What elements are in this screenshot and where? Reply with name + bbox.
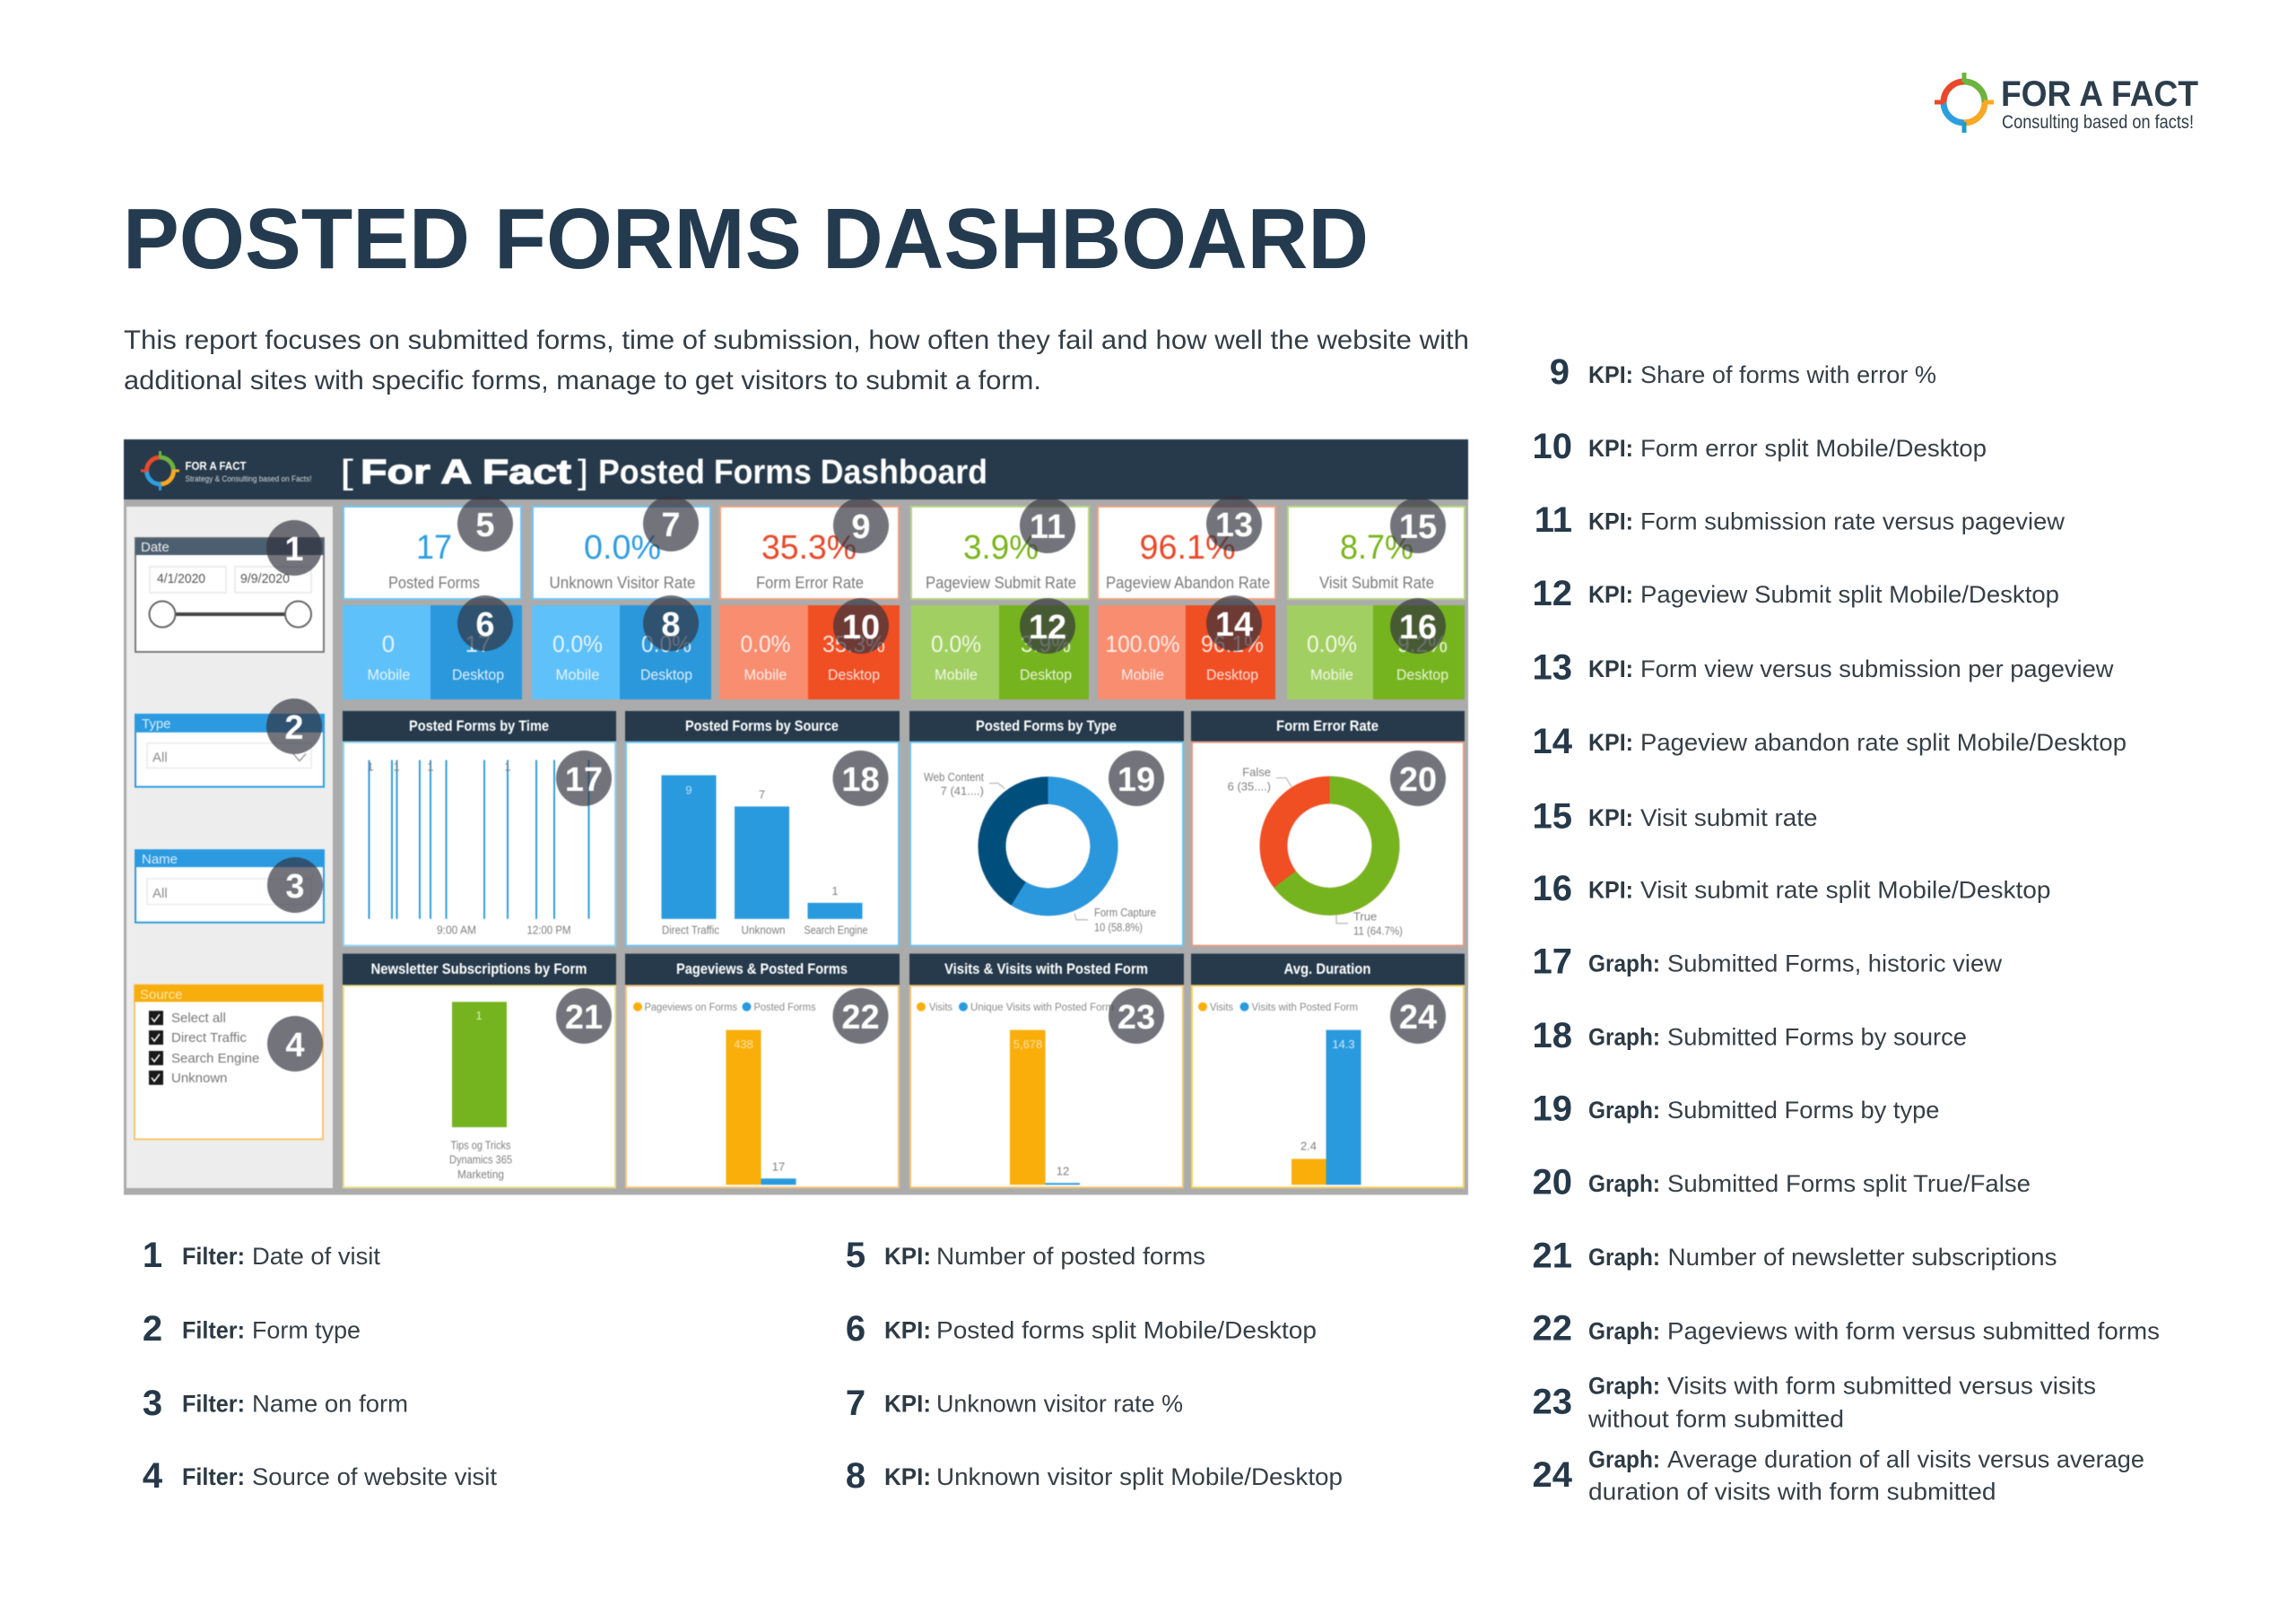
legend item 12: KPI:: [1588, 581, 1633, 608]
dashboard header: FOR A FACT: [185, 459, 247, 473]
legend item 3: [143, 1384, 408, 1423]
KPI card: unknown visitor rate: Desktop: [640, 666, 692, 683]
chart: form error rate: 11 (64.7%): [1353, 924, 1403, 938]
intro text: [124, 325, 1469, 395]
numbered badges overlay: 8: [661, 606, 681, 644]
legend item 8: KPI:: [884, 1463, 931, 1490]
numbered badges overlay: 6: [475, 606, 495, 644]
chart: average duration: 2.4: [1300, 1140, 1317, 1152]
numbered badges overlay: 10: [842, 609, 880, 647]
legend item 22: 22: [1532, 1309, 1572, 1349]
chart: posted forms by type: [909, 711, 1184, 946]
legend item 1: 1: [143, 1236, 162, 1275]
chart: newsletter subscriptions by form: [343, 954, 616, 1187]
chart: posted forms by type: Posted Forms by Type: [976, 717, 1117, 734]
legend item 14: [1532, 722, 2126, 761]
legend item 6: 6: [846, 1309, 865, 1349]
legend item 3: 3: [143, 1384, 162, 1423]
numbered badges overlay: 17: [565, 761, 603, 799]
numbered badges overlay: 7: [661, 507, 681, 544]
legend item 1: Filter:: [182, 1243, 245, 1270]
chart: posted forms by time: 1: [367, 760, 374, 774]
numbered badges overlay: 15: [1399, 508, 1437, 546]
KPI card: pageview submit rate: [911, 507, 1089, 699]
legend item 24: Graph:: [1588, 1445, 1660, 1472]
KPI card: form error rate: 35.3%: [822, 630, 885, 657]
legend item 9: 9: [1550, 352, 1570, 392]
KPI card: pageview submit rate: Desktop: [1020, 666, 1072, 683]
chart: posted forms by source: 9: [685, 784, 692, 796]
filter: date: 9/9/2020: [240, 571, 290, 586]
legend item 15: Visit submit rate: [1640, 804, 1817, 831]
legend item 23: [1532, 1372, 2096, 1433]
KPI card: pageview abandon rate: Pageview Abandon Rate: [1106, 574, 1270, 592]
chart: newsletter subscriptions by form: Tips og Tricks: [450, 1139, 511, 1151]
chart: visits and visits with posted form: [909, 954, 1184, 1187]
legend item 22: Pageviews with form versus submitted forms: [1667, 1318, 2160, 1345]
legend item 23: without form submitted: [1587, 1406, 1844, 1433]
chart: pageviews and posted forms: 17: [772, 1159, 785, 1173]
legend item 11: [1535, 500, 2065, 540]
logo: For A Fact: [1935, 73, 2198, 133]
KPI card: visit submit rate: [1287, 507, 1465, 699]
legend item 13: 13: [1532, 647, 1572, 687]
legend item 16: Visit submit rate split Mobile/Desktop: [1640, 877, 2050, 904]
numbered badges overlay: 13: [1215, 507, 1253, 544]
legend item 8: 8: [846, 1456, 865, 1496]
legend item 4: 4: [143, 1456, 163, 1496]
legend item 21: 21: [1532, 1236, 1572, 1275]
numbered badges overlay: 3: [285, 868, 305, 906]
legend item 23: 23: [1532, 1383, 1572, 1422]
chart: posted forms by time: 12:00 PM: [526, 924, 570, 937]
legend item 20: Submitted Forms split True/False: [1667, 1170, 2031, 1197]
legend item 13: [1532, 647, 2114, 687]
chart: posted forms by type: Web Content: [924, 770, 984, 784]
filter sidebar: [126, 507, 333, 1188]
legend item 1: [143, 1236, 380, 1275]
chart: posted forms by source: Direct Traffic: [662, 924, 719, 937]
chart: visits and visits with posted form: Visits: [929, 1001, 952, 1013]
legend item 11: 11: [1535, 500, 1572, 540]
legend item 9: [1550, 352, 1936, 392]
dashboard header: For A Fact: [361, 454, 571, 491]
legend: filters column: [143, 1236, 497, 1496]
legend item 24: duration of visits with form submitted: [1588, 1478, 1996, 1505]
numbered badges overlay: 22: [841, 999, 880, 1037]
chart: posted forms by time: 1: [393, 760, 400, 774]
legend item 10: [1532, 427, 1987, 466]
legend item 14: KPI:: [1588, 729, 1633, 756]
legend item 20: Graph:: [1588, 1170, 1660, 1197]
filter: source: [135, 985, 323, 1140]
KPI card: form error rate: Desktop: [828, 666, 880, 683]
legend item 11: Form submission rate versus pageview: [1640, 508, 2065, 534]
chart: visits and visits with posted form: Visits & Visits with Posted Form: [944, 960, 1148, 977]
legend item 2: [143, 1309, 361, 1349]
KPI card: posted forms: [343, 507, 522, 699]
filter: date: 4/1/2020: [157, 571, 205, 586]
KPI card: pageview submit rate: 3.9%: [963, 529, 1039, 567]
numbered badges overlay: 24: [1399, 999, 1437, 1037]
chart: posted forms by time: 1: [427, 760, 434, 774]
legend item 8: [846, 1456, 1343, 1496]
legend item 6: Posted forms split Mobile/Desktop: [936, 1316, 1317, 1343]
KPI card: posted forms: Desktop: [452, 666, 504, 683]
chart: average duration: 14.3: [1332, 1037, 1355, 1051]
chart: posted forms by type: 7 (41....): [941, 784, 984, 797]
chart: newsletter subscriptions by form: 1: [475, 1009, 483, 1022]
panel: dashboard screenshot: [124, 439, 1468, 1194]
chart: posted forms by source: 7: [759, 787, 765, 801]
KPI card: pageview abandon rate: Desktop: [1206, 666, 1258, 683]
chart: posted forms by source: 1: [831, 884, 839, 898]
legend item 23: Graph:: [1588, 1372, 1660, 1399]
legend item 2: Form type: [252, 1316, 361, 1343]
chart: posted forms by source: Posted Forms by Source: [685, 717, 839, 734]
legend item 7: 7: [846, 1384, 865, 1423]
numbered badges overlay: 23: [1118, 999, 1155, 1037]
legend item 18: [1532, 1016, 1967, 1055]
legend item 2: Filter:: [182, 1316, 245, 1343]
legend item 5: 5: [846, 1236, 865, 1275]
legend item 8: Unknown visitor split Mobile/Desktop: [936, 1463, 1343, 1490]
filter: name: Name: [142, 852, 178, 867]
dashboard header: Posted Forms Dashboard: [598, 454, 987, 491]
logo: For A Fact: Consulting based on facts!: [2002, 112, 2194, 133]
filter: name: All: [152, 886, 168, 901]
legend item 19: Submitted Forms by type: [1667, 1097, 1939, 1124]
filter: name: [135, 850, 324, 923]
KPI card: posted forms: 17: [416, 529, 452, 567]
filter: type: All: [152, 751, 168, 766]
numbered badges overlay: 5: [475, 507, 495, 544]
KPI card: form error rate: Mobile: [744, 666, 787, 683]
numbered badges overlay: 9: [851, 508, 871, 546]
legend item 12: 12: [1532, 574, 1572, 613]
legend item 15: 15: [1532, 796, 1572, 836]
legend item 15: [1532, 796, 1817, 836]
chart: newsletter subscriptions by form: Marketing: [457, 1167, 504, 1181]
legend item 7: [846, 1384, 1183, 1423]
KPI card: posted forms: Posted Forms: [388, 574, 480, 592]
KPI card: pageview abandon rate: [1098, 507, 1275, 699]
filter: source: Unknown: [171, 1071, 227, 1086]
legend item 7: Unknown visitor rate %: [936, 1390, 1183, 1417]
chart: average duration: Avg. Duration: [1283, 960, 1370, 977]
legend item 17: 17: [1532, 942, 1572, 981]
legend item 14: 14: [1532, 722, 1573, 761]
legend item 20: 20: [1532, 1162, 1572, 1202]
chart: visits and visits with posted form: Unique Visits with Posted Form: [970, 1001, 1114, 1013]
KPI card: visit submit rate: 0.0%: [1307, 630, 1357, 657]
intro text: additional sites with specific forms, manage to get visitors to submit a form.: [124, 366, 1041, 395]
KPI card: posted forms: Mobile: [368, 666, 411, 683]
KPI card: form error rate: [719, 507, 900, 699]
KPI card: unknown visitor rate: 0.0%: [584, 529, 661, 567]
chart: form error rate: True: [1353, 910, 1377, 924]
legend item 19: 19: [1532, 1089, 1572, 1128]
title: POSTED: [123, 191, 470, 287]
chart: average duration: Visits with Posted Form: [1251, 1001, 1358, 1013]
filter: type: [135, 715, 324, 787]
KPI card: form error rate: 0.0%: [741, 630, 791, 657]
dashboard header: Strategy & Consulting based on Facts!: [185, 474, 312, 483]
chart: form error rate: 6 (35....): [1228, 780, 1271, 793]
chart: posted forms by time: 9:00 AM: [437, 924, 476, 937]
KPI card: visit submit rate: 8.7%: [1340, 529, 1413, 567]
filter: date: Date: [141, 540, 170, 555]
numbered badges overlay: 4: [285, 1027, 305, 1064]
chart: average duration: [1191, 954, 1465, 1187]
legend item 11: KPI:: [1588, 508, 1633, 534]
legend item 2: 2: [143, 1309, 162, 1349]
chart: pageviews and posted forms: Posted Forms: [753, 1001, 816, 1013]
chart: posted forms by time: 1: [504, 760, 511, 774]
legend item 10: Form error split Mobile/Desktop: [1640, 435, 1987, 462]
chart: newsletter subscriptions by form: Dynamics 365: [449, 1152, 512, 1166]
filter: date: [135, 538, 324, 652]
legend item 5: Number of posted forms: [936, 1243, 1205, 1270]
KPI card: posted forms: 17: [465, 630, 491, 657]
numbered badges overlay: 1: [284, 531, 304, 568]
legend item 13: KPI:: [1588, 655, 1633, 682]
legend item 24: [1532, 1445, 2144, 1505]
legend item 9: Share of forms with error %: [1640, 361, 1936, 388]
legend item 10: 10: [1532, 427, 1572, 466]
numbered badges overlay: 21: [565, 999, 603, 1037]
filter: source: Direct Traffic: [171, 1030, 247, 1046]
dashboard header: [: [340, 454, 354, 491]
legend item 18: Graph:: [1588, 1024, 1660, 1051]
chart: visits and visits with posted form: 5,678: [1013, 1037, 1042, 1051]
legend item 18: Submitted Forms by source: [1667, 1024, 1967, 1051]
legend item 9: KPI:: [1588, 361, 1633, 388]
dashboard header: [124, 439, 1468, 499]
legend item 10: KPI:: [1588, 435, 1633, 462]
legend item 6: [846, 1309, 1317, 1349]
numbered badges overlay: 20: [1399, 761, 1437, 799]
chart: pageviews and posted forms: [625, 954, 900, 1187]
KPI card: visit submit rate: Visit Submit Rate: [1319, 574, 1434, 592]
chart: average duration: Visits: [1210, 1001, 1233, 1013]
filter: source: Source: [140, 987, 183, 1002]
KPI card: posted forms: 0: [382, 630, 395, 657]
KPI card: unknown visitor rate: 0.0%: [641, 630, 691, 657]
intro text: This report focuses on submitted forms, time of submission, how often they fail and how well the website with: [124, 325, 1469, 355]
chart: pageviews and posted forms: Pageviews & Posted Forms: [676, 960, 848, 977]
KPI card: visit submit rate: 9.2%: [1397, 630, 1448, 657]
legend: right column: [1532, 352, 2160, 1505]
KPI card: pageview abandon rate: 100.0%: [1105, 630, 1180, 657]
legend item 3: Name on form: [252, 1390, 408, 1417]
chart: form error rate: Form Error Rate: [1276, 717, 1378, 734]
legend item 15: KPI:: [1588, 804, 1633, 831]
chart: pageviews and posted forms: Pageviews on Forms: [644, 1001, 737, 1013]
legend item 22: [1532, 1309, 2160, 1349]
chart: posted forms by type: 10 (58.8%): [1094, 921, 1143, 934]
legend item 21: [1532, 1236, 2057, 1275]
KPI card: form error rate: Form Error Rate: [756, 574, 864, 592]
legend item 17: [1532, 942, 2002, 981]
chart: form error rate: [1191, 711, 1465, 946]
filter: source: Select all: [171, 1011, 226, 1026]
legend item 1: Date of visit: [252, 1243, 380, 1270]
legend item 22: Graph:: [1588, 1318, 1660, 1345]
legend item 17: Submitted Forms, historic view: [1667, 950, 2002, 977]
legend item 13: Form view versus submission per pageview: [1640, 655, 2114, 682]
dashboard header: ]: [578, 454, 588, 491]
KPI card: unknown visitor rate: [532, 507, 711, 699]
legend item 4: Filter:: [182, 1463, 245, 1490]
legend item 7: KPI:: [884, 1390, 931, 1417]
filter: source: Search Engine: [171, 1051, 259, 1066]
KPI card: unknown visitor rate: 0.0%: [552, 630, 603, 657]
KPI card: visit submit rate: Mobile: [1310, 666, 1353, 683]
numbered badges overlay: 14: [1215, 606, 1253, 644]
legend item 6: KPI:: [884, 1316, 931, 1343]
numbered badges overlay: 18: [841, 761, 880, 799]
KPI card: pageview abandon rate: 96.1%: [1201, 630, 1264, 657]
legend item 14: Pageview abandon rate split Mobile/Desktop: [1640, 729, 2126, 756]
legend item 19: [1532, 1089, 1939, 1128]
legend item 17: Graph:: [1588, 950, 1660, 977]
KPI card: form error rate: 35.3%: [761, 529, 857, 567]
chart: visits and visits with posted form: 12: [1057, 1164, 1069, 1177]
numbered badges overlay: 16: [1399, 609, 1437, 647]
title: FORMS: [494, 191, 802, 287]
numbered badges overlay: 11: [1030, 508, 1065, 546]
KPI card: pageview abandon rate: 96.1%: [1139, 529, 1236, 567]
legend item 20: [1532, 1162, 2031, 1202]
numbered badges overlay: [266, 496, 1446, 1072]
legend: KPI middle column: [846, 1236, 1343, 1496]
legend item 21: Graph:: [1588, 1244, 1660, 1271]
KPI card: unknown visitor rate: Mobile: [556, 666, 599, 683]
legend item 23: Visits with form submitted versus visits: [1667, 1372, 2096, 1399]
chart: posted forms by time: Posted Forms by Time: [409, 717, 549, 734]
logo: For A Fact: FOR A FACT: [2001, 74, 2198, 114]
legend item 12: Pageview Submit split Mobile/Desktop: [1640, 581, 2059, 608]
KPI card: visit submit rate: Desktop: [1396, 666, 1448, 683]
legend item 16: KPI:: [1588, 877, 1633, 904]
legend item 19: Graph:: [1588, 1097, 1660, 1124]
chart: form error rate: False: [1242, 766, 1271, 779]
KPI card: pageview submit rate: Mobile: [935, 666, 978, 683]
legend item 18: 18: [1532, 1016, 1572, 1055]
legend item 16: [1532, 869, 2050, 908]
legend item 24: 24: [1532, 1455, 1573, 1495]
filter: type: Type: [142, 716, 171, 732]
chart: pageviews and posted forms: 438: [734, 1037, 753, 1051]
KPI card: unknown visitor rate: Unknown Visitor Rate: [549, 574, 696, 592]
numbered badges overlay: 2: [284, 709, 304, 747]
title: DASHBOARD: [822, 191, 1369, 287]
chart: posted forms by type: Form Capture: [1094, 906, 1156, 919]
legend item 4: Source of website visit: [252, 1463, 497, 1490]
legend item 3: Filter:: [182, 1390, 245, 1417]
title: [123, 191, 1369, 287]
legend item 21: Number of newsletter subscriptions: [1668, 1244, 2057, 1271]
legend item 5: [846, 1236, 1205, 1275]
legend item 12: [1532, 574, 2059, 613]
chart: posted forms by source: Search Engine: [804, 924, 867, 937]
numbered badges overlay: 19: [1118, 761, 1155, 799]
chart: posted forms by time: [343, 711, 616, 946]
KPI card: pageview abandon rate: Mobile: [1121, 666, 1164, 683]
chart: posted forms by source: Unknown: [741, 924, 786, 937]
legend item 16: 16: [1532, 869, 1572, 908]
KPI card: pageview submit rate: 3.9%: [1021, 630, 1071, 657]
chart: posted forms by source: [625, 711, 900, 946]
legend item 5: KPI:: [884, 1243, 931, 1270]
numbered badges overlay: 12: [1029, 609, 1066, 647]
legend item 24: Average duration of all visits versus average: [1667, 1445, 2144, 1472]
KPI card: pageview submit rate: Pageview Submit Rate: [926, 574, 1076, 592]
KPI card: pageview submit rate: 0.0%: [931, 630, 981, 657]
legend item 4: [143, 1456, 497, 1496]
chart: newsletter subscriptions by form: Newsletter Subscriptions by Form: [370, 960, 587, 977]
